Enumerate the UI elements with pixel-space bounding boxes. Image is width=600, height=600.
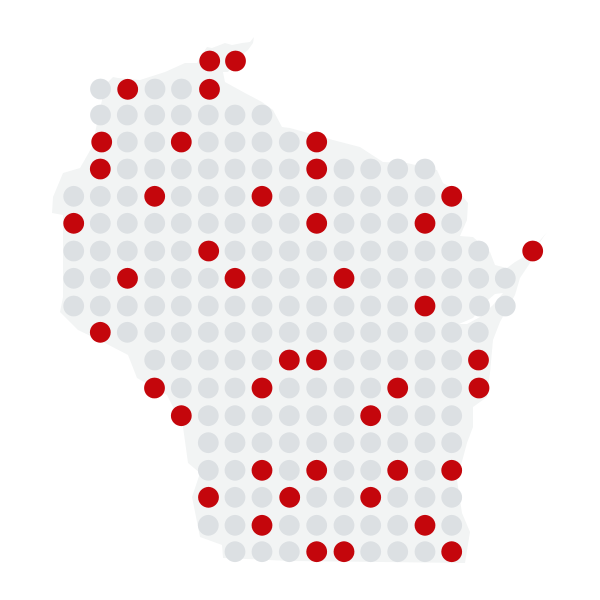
gray dots [63, 79, 516, 562]
dot grid: gray and red county markers [63, 51, 543, 562]
red dots [63, 51, 543, 562]
map: Wisconsin state silhouette [52, 37, 547, 563]
